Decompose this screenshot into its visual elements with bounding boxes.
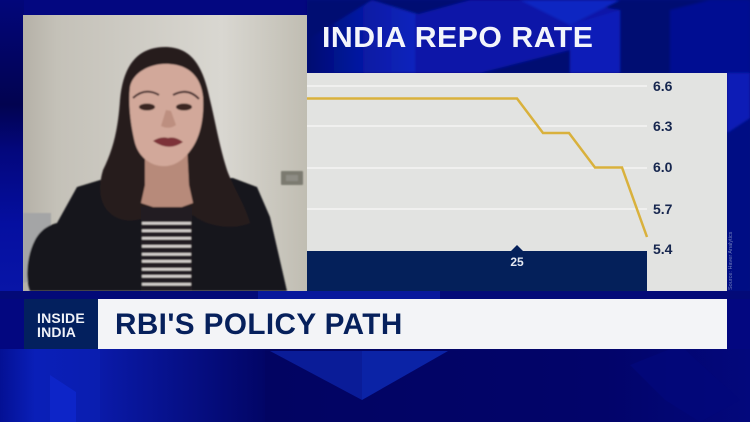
tick marker xyxy=(511,245,523,251)
blazer xyxy=(27,178,287,291)
y axis labels xyxy=(653,78,673,257)
panel: video of speaker xyxy=(23,15,307,291)
label box: Inside India xyxy=(24,299,98,349)
x axis label: 25 xyxy=(510,255,524,269)
label box: Inside India: INDIA xyxy=(37,324,76,340)
light switch xyxy=(281,171,303,185)
headline bar: RBI'S POLICY PATH xyxy=(115,308,403,341)
chart heading: INDIA REPO RATE xyxy=(322,22,593,54)
repo rate line xyxy=(307,98,647,237)
neck xyxy=(141,145,193,212)
x axis band xyxy=(307,251,647,291)
y axis labels: 6.6 xyxy=(653,78,673,94)
sofa at left xyxy=(23,213,51,283)
panel: line chart xyxy=(307,73,727,291)
face xyxy=(129,64,203,166)
line chart: India repo rate xyxy=(307,78,673,291)
y axis labels: 5.4 xyxy=(653,241,673,257)
lips xyxy=(153,137,183,147)
source note: Source: Haver Analytics xyxy=(728,232,734,290)
headline bar xyxy=(98,299,727,349)
y axis labels: 6.3 xyxy=(653,118,673,134)
striped top xyxy=(141,207,192,291)
label box: Inside India: INSIDE xyxy=(37,310,85,326)
hair xyxy=(100,47,250,227)
y axis labels: 5.7 xyxy=(653,201,673,217)
wall xyxy=(23,15,307,291)
y axis labels: 6.0 xyxy=(653,159,673,175)
eyes and brows xyxy=(133,92,199,128)
